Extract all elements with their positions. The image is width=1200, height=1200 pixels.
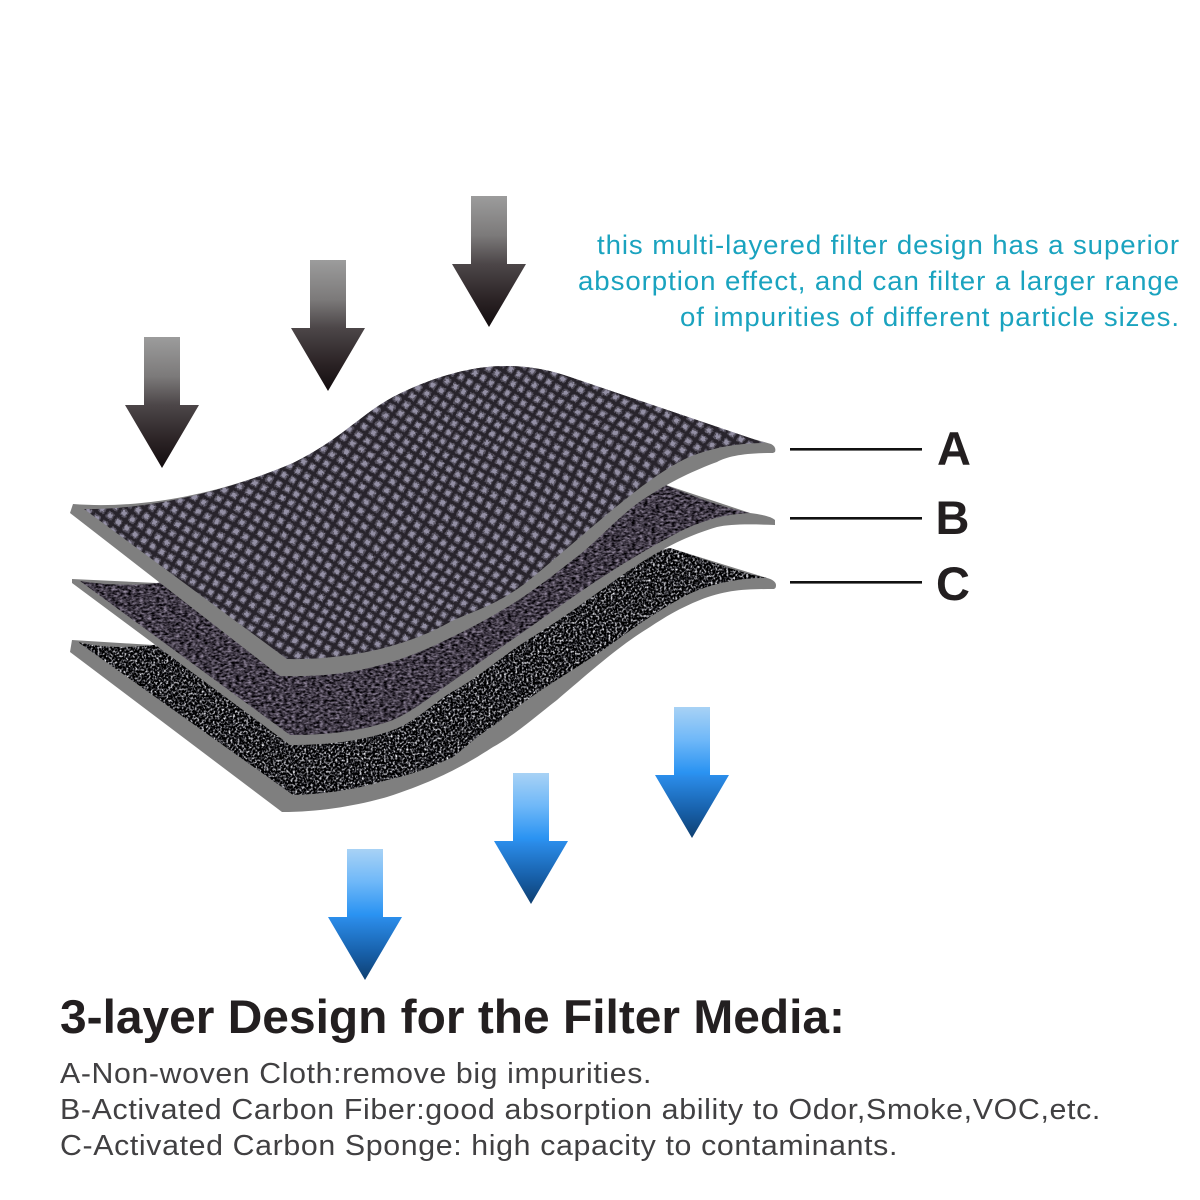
layer descriptions: C-Activated Carbon Sponge: high capacity to contaminants.	[60, 1130, 898, 1162]
arrow: incoming air middle	[291, 260, 365, 391]
layer label B: B	[936, 491, 969, 544]
layer descriptions	[60, 1058, 1101, 1162]
layer descriptions: A-Non-woven Cloth:remove big impurities.	[60, 1058, 652, 1090]
callout: multi-layered filter description: of impurities of different particle sizes.	[680, 302, 1180, 332]
arrow: incoming air right	[452, 196, 526, 327]
layer label C: C	[936, 557, 970, 610]
layer A: non-woven cloth	[70, 366, 776, 676]
arrow: clean air right	[655, 707, 729, 838]
arrow: incoming air left	[125, 337, 199, 468]
callout: multi-layered filter description	[578, 230, 1180, 332]
arrow: clean air left	[328, 849, 402, 980]
infographic canvas	[60, 196, 1179, 1161]
callout: multi-layered filter description: this multi-layered filter design has a superior	[597, 230, 1180, 260]
callout: multi-layered filter description: absorption effect, and can filter a larger range	[578, 266, 1180, 296]
layer descriptions: B-Activated Carbon Fiber:good absorption ability to Odor,Smoke,VOC,etc.	[60, 1094, 1101, 1126]
layer B: activated carbon fiber	[72, 484, 775, 745]
arrow: clean air middle	[494, 773, 568, 904]
layer C: activated carbon sponge	[70, 548, 776, 812]
heading: 3-layer Design for the Filter Media:	[60, 990, 845, 1043]
layer label A: A	[937, 422, 971, 475]
filter layers illustration	[70, 366, 776, 812]
